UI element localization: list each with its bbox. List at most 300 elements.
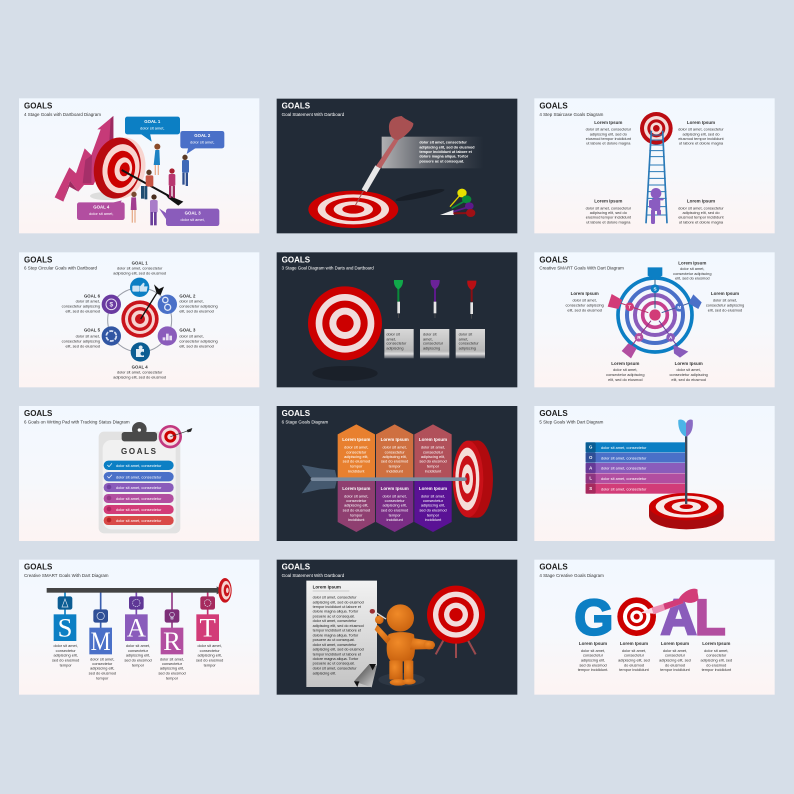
hexagon 5: sed do eiusmod xyxy=(381,507,408,512)
text: R: consectetur adipiscing xyxy=(606,372,645,377)
stacked bars: dolor sit amet, consectetur xyxy=(601,486,647,491)
grey text band: posuere ac ut consequat. xyxy=(419,159,464,163)
text: A: elit, sed do eiusmod xyxy=(671,377,706,382)
text: bottom left: dolor sit amet, consectetur xyxy=(586,205,632,210)
text columns: consectetur xyxy=(624,653,645,658)
hexagon 1: adipiscing elit, xyxy=(344,454,369,459)
hexagon 5: Lorem Ipsum xyxy=(381,486,409,491)
text columns: consectetur xyxy=(706,653,727,658)
people xyxy=(131,144,189,225)
slide subtitle: 3 Stage Goal Diagram with Darts and Dartboard xyxy=(282,266,374,271)
dartboard xyxy=(89,134,149,202)
text columns: dolor sit amet, xyxy=(704,648,729,653)
status list: dolor sit amet, consectetur xyxy=(116,485,162,490)
paper note: posuere ac ut consequat. xyxy=(313,662,355,666)
hexagon 5: tempor xyxy=(389,512,401,517)
letter badges: S xyxy=(653,286,657,291)
text: R: consectetur xyxy=(162,661,183,666)
hexagon 5: consectetur xyxy=(385,498,405,503)
word GOAL letters: L xyxy=(695,590,726,646)
connectors xyxy=(65,588,208,628)
grey text band xyxy=(382,137,483,168)
text: top right: dolor sit amet, consectetur xyxy=(678,127,724,132)
arrow xyxy=(302,465,467,493)
text: bottom left: eiusmod tempor incididunt xyxy=(586,215,632,220)
status list: dolor sit amet, consectetur xyxy=(116,496,162,501)
text box 3: dolor sit xyxy=(459,331,473,336)
stacked bars: L xyxy=(589,476,592,481)
slide title: GOALS xyxy=(282,563,311,572)
text: goal 2: GOAL 2 xyxy=(179,294,196,299)
text: S: elit, sed do eiusmod xyxy=(675,276,710,281)
hexagon 6: tempor xyxy=(427,512,440,517)
hexagon 3: sed do eiusmod xyxy=(419,459,447,464)
letter blocks: T xyxy=(200,613,216,643)
text: A: consectetur xyxy=(128,648,149,653)
letter blocks: M xyxy=(91,626,111,656)
slide title: GOALS xyxy=(282,255,311,264)
paper note xyxy=(306,581,377,687)
text columns: adipiscing elit, sed xyxy=(700,657,732,662)
text: bottom right: dolor sit amet, consectetur xyxy=(678,205,724,210)
hexagon 3: adipiscing elit, xyxy=(421,454,445,459)
text columns: tempor incididunt xyxy=(619,667,650,672)
dart arrow xyxy=(122,170,183,206)
hexagon 6: incididunt xyxy=(425,517,442,522)
word GOAL letters: G xyxy=(574,590,613,646)
text: bottom right: Lorem Ipsum xyxy=(687,199,715,204)
text: goal 4: GOAL 4 xyxy=(132,364,148,369)
paper note: adipiscing elit, sed do eiusmod xyxy=(313,600,364,604)
text: T: consectetur adipiscing xyxy=(565,302,604,307)
dartboard xyxy=(640,112,673,145)
callout: goal 3 xyxy=(159,208,219,226)
status list xyxy=(104,461,174,525)
hand dart xyxy=(370,609,386,619)
slide title: GOALS xyxy=(24,255,53,264)
slide subtitle: 6 Stage Goals Diagram xyxy=(282,419,329,424)
status list: dolor sit amet, consectetur xyxy=(116,463,162,468)
slide subtitle: 6 Step Circular Goals with Dartboard xyxy=(24,266,98,271)
five darts xyxy=(608,267,702,358)
text: R: adipiscing elit, xyxy=(160,666,184,671)
paper note: dolore magna aliqua. Tortor xyxy=(313,633,359,637)
text: goal 2 xyxy=(179,294,218,314)
icon circles: $ xyxy=(109,302,113,309)
callout: goal 4: GOAL 4 xyxy=(93,205,110,210)
text: T: tempor xyxy=(204,662,216,667)
text: A: consectetur adipiscing xyxy=(669,372,708,377)
slide title: GOALS xyxy=(539,409,568,418)
text columns: consectetur xyxy=(665,653,686,658)
text columns: dolor sit amet, xyxy=(581,648,605,653)
hexagon 2: sed do eiusmod xyxy=(381,459,408,464)
paper note: tempor incididunt ut labore et xyxy=(313,605,362,609)
text columns: adipiscing elit, sed xyxy=(618,657,650,662)
text box 1: adipiscing xyxy=(386,346,404,351)
text: top right: adipiscing elit, sed do xyxy=(682,131,720,136)
hexagon 1: dolor sit amet, xyxy=(344,445,369,450)
slide title: GOALS xyxy=(24,102,53,111)
callout: goal 4: dolor sit amet, xyxy=(89,211,114,216)
status list: dolor sit amet, consectetur xyxy=(116,507,162,512)
panel: goal statement with dartboard xyxy=(277,99,517,233)
text: T: Lorem Ipsum xyxy=(571,291,599,296)
text columns: Lorem Ipsum xyxy=(702,641,730,646)
text: T: consectetur xyxy=(200,648,220,653)
text: goal 1: GOAL 1 xyxy=(132,261,148,266)
paper note: dolor sit amet, consectetur xyxy=(313,596,357,600)
text box 2: consectetur xyxy=(423,341,444,346)
hexagon 4: tempor xyxy=(350,512,363,517)
hexagon 5: incididunt xyxy=(386,517,404,522)
text: goal 2: dolor sit amet, xyxy=(179,299,204,304)
text box 3: adipiscing xyxy=(459,346,476,351)
text: S: dolor sit amet, xyxy=(680,266,705,271)
icon: rising arrow xyxy=(55,116,113,202)
text: top right: ut labore et dolore magna xyxy=(679,141,724,146)
callout: goal 2: dolor sit amet, xyxy=(190,139,215,144)
status list: dolor sit amet, consectetur xyxy=(116,518,162,523)
text columns: dolor sit amet, xyxy=(622,648,646,653)
hexagon 2: consectetur xyxy=(385,449,405,454)
stacked bars xyxy=(586,442,686,494)
slide title: GOALS xyxy=(539,102,568,111)
panel: 4 step staircase goals xyxy=(534,98,775,233)
hexagon 5: adipiscing elit, xyxy=(382,503,407,508)
grey text band: dolor sit amet, consectetur xyxy=(419,141,467,145)
text: goal 5: elit, sed do eiusmod xyxy=(66,343,100,348)
text: T: adipiscing elit, xyxy=(197,653,222,658)
hexagon 1 xyxy=(338,424,375,478)
text columns: adipiscing elit, xyxy=(581,657,605,662)
hexagon 1: sed do eiusmod xyxy=(343,459,370,464)
text: T: dolor sit amet, xyxy=(197,643,222,648)
hexagon 6: consectetur xyxy=(423,498,444,503)
horizontal dart bar xyxy=(47,578,232,603)
stacked bars: O xyxy=(589,455,593,460)
pink dart xyxy=(640,589,698,614)
hexagon 3: incididunt xyxy=(425,468,442,473)
text columns: adipiscing elit, sed xyxy=(659,657,691,662)
text: top left: Lorem Ipsum xyxy=(594,120,622,125)
text: bottom left: ut labore et dolore magna xyxy=(586,219,631,224)
panel: 6 goals on writing pad xyxy=(19,406,259,541)
text: goal 4: adipiscing elit, sed do eiusmod xyxy=(113,375,166,380)
text box 2: amet, xyxy=(423,336,433,341)
letter blocks: A xyxy=(127,613,147,643)
hexagon 2: tempor xyxy=(389,464,401,469)
text: goal 2: consectetur adipiscing xyxy=(179,304,218,309)
text: S: Lorem Ipsum xyxy=(678,260,706,265)
slide subtitle: Goal Statement With Dartboard xyxy=(282,112,345,117)
hexagon 5 xyxy=(376,481,413,532)
panel: creative SMART timeline xyxy=(19,560,259,695)
text: T: elit, sed do eiusmod xyxy=(567,307,602,312)
paper note: tempor incididunt ut labore et xyxy=(313,652,362,656)
stacked bars: A xyxy=(589,465,593,470)
text box 2: dolor sit xyxy=(423,331,437,336)
dartboard on stand xyxy=(427,586,485,658)
text: top left: ut labore et dolore magna xyxy=(586,141,631,146)
text box 1: consectetur xyxy=(386,341,407,346)
text box 1: amet, xyxy=(386,336,396,341)
text box 2: adipiscing xyxy=(423,346,440,351)
text columns: Lorem Ipsum xyxy=(620,641,648,646)
text columns: Lorem Ipsum xyxy=(579,641,607,646)
dartboard xyxy=(308,286,382,381)
text: goal 5: dolor sit amet, xyxy=(76,334,100,339)
panel: creative SMART goals dartboard xyxy=(534,252,775,387)
letter blocks: R xyxy=(163,626,181,656)
text: M: consectetur xyxy=(92,661,113,666)
text: S xyxy=(673,260,712,281)
text box 3 xyxy=(456,329,485,358)
hexagon 1: consectetur xyxy=(346,449,367,454)
text: M: adipiscing elit, xyxy=(90,666,115,671)
text: goal 1 xyxy=(113,261,166,276)
text: M: dolor sit amet, xyxy=(713,298,737,303)
text: R: sed do eiusmod xyxy=(158,670,186,675)
text: goal 4: dolor sit amet, consectetur xyxy=(117,370,163,375)
paper note: adipiscing elit. xyxy=(313,671,336,675)
letter badges: A xyxy=(669,335,673,340)
stacked bars: S xyxy=(589,486,592,491)
hexagon 4: dolor sit amet, xyxy=(344,493,369,498)
text columns: do eiusmod xyxy=(706,662,726,667)
icon tiles xyxy=(58,596,215,623)
slide title: GOALS xyxy=(24,409,53,418)
text: S: adipiscing elit, xyxy=(53,653,78,658)
text: goal 3: consectetur adipiscing xyxy=(179,338,218,343)
callout: goal 4 xyxy=(77,200,125,220)
dart: purple xyxy=(431,280,440,318)
text: goal 3: elit, sed do eiusmod xyxy=(179,343,214,348)
text columns xyxy=(578,641,732,672)
paper note: tempor incididunt ut labore et xyxy=(313,629,362,633)
stacked bars: G xyxy=(589,445,593,450)
slide title: GOALS xyxy=(539,563,568,572)
letter badges: T xyxy=(628,304,631,309)
text: top left: adipiscing elit, sed do xyxy=(590,131,627,136)
clipboard heading: GOALS xyxy=(121,447,158,456)
slide subtitle: Creative SMART Goals With Dart Diagram xyxy=(539,266,624,271)
slide subtitle: 4 Stage Goals with Dartboard Diagram xyxy=(24,112,101,117)
hexagon 3: dolor sit amet, xyxy=(421,445,445,450)
slide title: GOALS xyxy=(282,409,311,418)
hexagon 4 xyxy=(338,481,375,532)
hexagon 4: incididunt xyxy=(348,517,365,522)
text: A: dolor sit amet, xyxy=(126,643,150,648)
text columns: dolor sit amet, xyxy=(663,648,687,653)
text: bottom left: adipiscing elit, sed do xyxy=(590,210,627,215)
ring xyxy=(108,288,172,352)
text: S: consectetur adipiscing xyxy=(673,271,712,276)
panel: goal statement with figure xyxy=(277,560,517,695)
text box 3: consectetur xyxy=(459,341,479,346)
dart: green xyxy=(394,280,403,318)
hexagon 4: sed do eiusmod xyxy=(343,507,370,512)
text: goal 1: dolor sit amet, consectetur xyxy=(117,266,163,271)
hexagon 3: Lorem Ipsum xyxy=(419,437,447,442)
text box 3: amet, xyxy=(459,336,468,341)
text: top right xyxy=(678,120,725,146)
slide subtitle: 4 Step Staircase Goals Diagram xyxy=(539,112,604,117)
paper note: dolor sit amet, consectetur xyxy=(313,619,357,623)
text: bottom right: eiusmod tempor incididunt xyxy=(678,215,725,220)
hexagon 5: dolor sit amet, xyxy=(382,493,407,498)
text: goal 6 xyxy=(62,294,101,314)
text: bottom right: adipiscing elit, sed do xyxy=(682,210,720,215)
stacked bars: dolor sit amet, consectetur xyxy=(601,466,647,471)
text: M: dolor sit amet, xyxy=(90,656,115,661)
text: M: tempor xyxy=(96,675,109,680)
letter badges: R xyxy=(637,335,641,340)
text: S: consectetur xyxy=(56,648,76,653)
letter badges xyxy=(625,284,684,342)
text: goal 5: consectetur adipiscing xyxy=(62,338,100,343)
text: bottom right xyxy=(678,199,725,224)
text: S: dolor sit amet, xyxy=(53,643,78,648)
text columns: tempor incididunt. xyxy=(578,667,608,672)
letter blocks xyxy=(54,613,219,656)
hexagon 3: consectetur xyxy=(423,449,444,454)
text: A: Lorem Ipsum xyxy=(675,361,703,366)
text: top left: dolor sit amet, consectetur xyxy=(586,127,632,132)
3D dartboard xyxy=(649,493,724,529)
text box 2 xyxy=(420,329,449,358)
letter badges: M xyxy=(677,305,681,310)
callout: goal 1 xyxy=(125,117,180,142)
stacked bars: dolor sit amet, consectetur xyxy=(601,445,647,450)
stacked bars: dolor sit amet, consectetur xyxy=(601,476,647,481)
hexagon 4: Lorem Ipsum xyxy=(342,486,370,491)
text: R: dolor sit amet, xyxy=(160,656,184,661)
callout: goal 2 xyxy=(180,131,224,154)
text: R: Lorem Ipsum xyxy=(611,361,639,366)
text: A: dolor sit amet, xyxy=(676,367,701,372)
paper note: dolor sit amet, consectetur xyxy=(313,667,357,671)
text: M: consectetur adipiscing xyxy=(706,302,744,307)
text: A: tempor xyxy=(132,662,145,667)
slide subtitle: 5 Step Goals With Dart Diagram xyxy=(539,419,604,424)
callout: goal 1: GOAL 1 xyxy=(144,119,161,124)
status list: dolor sit amet, consectetur xyxy=(116,474,162,479)
text columns: sed do eiusmod xyxy=(579,662,607,667)
text: A: adipiscing elit, xyxy=(126,653,150,658)
letter blocks: S xyxy=(58,613,72,643)
hexagon 1: incididunt xyxy=(348,468,365,473)
text: S: sed do eiusmod xyxy=(52,657,79,662)
text: T: dolor sit amet, xyxy=(572,298,597,303)
text: M: sed do eiusmod xyxy=(89,670,116,675)
text: goal 6: consectetur adipiscing xyxy=(62,304,100,309)
hexagon 2: incididunt xyxy=(386,468,404,473)
text: top left: eiusmod tempor incididunt xyxy=(586,136,632,141)
hexagon 3 xyxy=(414,424,452,478)
paper note: posuere ac ut consequat. xyxy=(313,638,355,642)
hexagon 2: adipiscing elit, xyxy=(382,454,407,459)
badge dartboard xyxy=(159,425,192,448)
slide subtitle: 6 Goals on Writing Pad with Tracking Status Diagram xyxy=(24,419,130,424)
text: T: sed do eiusmod xyxy=(196,657,223,662)
dart xyxy=(141,284,164,319)
hexagon 4: adipiscing elit, xyxy=(344,503,369,508)
text: goal 3: GOAL 3 xyxy=(179,328,196,333)
text: top right: eiusmod tempor incididunt xyxy=(678,136,725,141)
text: goal 5 xyxy=(62,328,101,348)
text: goal 6: elit, sed do eiusmod xyxy=(66,309,100,314)
text box 1 xyxy=(384,329,414,358)
dart xyxy=(678,419,693,504)
callout: goal 2: GOAL 2 xyxy=(194,133,211,138)
text box 1: dolor sit xyxy=(386,331,401,336)
hexagon 6: adipiscing elit, xyxy=(421,503,445,508)
slide title: GOALS xyxy=(539,255,568,264)
dartboard xyxy=(121,300,159,338)
concentric rings xyxy=(618,278,692,352)
slide subtitle: Goal Statement With Dartboard xyxy=(282,573,345,578)
clipboard xyxy=(99,422,180,533)
hexagon 2: Lorem Ipsum xyxy=(381,437,409,442)
panel: 6 step circular goals xyxy=(19,252,259,387)
panel: 3 stage goal with darts xyxy=(277,252,517,387)
text: goal 6: dolor sit amet, xyxy=(76,299,100,304)
text: goal 6: GOAL 6 xyxy=(84,294,101,299)
text: goal 2: elit, sed do eiusmod xyxy=(179,309,214,314)
text columns: Lorem Ipsum xyxy=(661,641,689,646)
hexagon 1: Lorem Ipsum xyxy=(342,437,370,442)
dart: red xyxy=(467,281,476,319)
large dart xyxy=(355,116,413,205)
dartboard xyxy=(308,191,398,228)
paper note: Lorem Ipsum xyxy=(313,585,341,590)
hexagon 2: dolor sit amet, xyxy=(382,445,407,450)
slide subtitle: 4 Stage Creative Goals Diagram xyxy=(539,573,604,578)
callout: goal 3: GOAL 3 xyxy=(185,211,201,216)
panel: 4 stage creative goals xyxy=(534,560,775,695)
hexagon 2 xyxy=(376,424,413,478)
text: top left xyxy=(586,120,632,146)
paper note: dolore magna aliqua. Tortor xyxy=(313,657,359,661)
hexagon 1: tempor xyxy=(350,464,363,469)
text: goal 5: GOAL 5 xyxy=(84,328,101,333)
hexagon 6: sed do eiusmod xyxy=(419,507,447,512)
small coloured darts xyxy=(395,187,475,217)
slide title: GOALS xyxy=(282,102,311,111)
target O xyxy=(617,597,656,636)
callout: goal 1: dolor sit amet, xyxy=(140,125,165,130)
dartboard 3D xyxy=(453,440,493,518)
text: R: elit, sed do eiusmod xyxy=(608,377,643,382)
text columns: tempor incididunt xyxy=(702,667,732,672)
text: A: sed do eiusmod xyxy=(124,657,152,662)
text: goal 4 xyxy=(113,364,166,380)
paper note: adipiscing elit, sed do eiusmod xyxy=(313,624,364,628)
panel: 6 stage goals hexagons xyxy=(277,406,517,541)
slide title: GOALS xyxy=(24,563,53,572)
text columns: tempor incididunt xyxy=(660,667,691,672)
paper note: adipiscing elit, sed do eiusmod xyxy=(313,648,364,652)
stacked bars: dolor sit amet, consectetur xyxy=(601,455,647,460)
icon circles xyxy=(102,278,177,362)
text: M xyxy=(706,291,744,312)
ladder xyxy=(646,131,667,223)
text: bottom left: Lorem Ipsum xyxy=(594,199,622,204)
orange figure xyxy=(375,604,435,686)
grey text band: adipiscing elit, sed do eiusmod xyxy=(419,145,475,149)
paper note: posuere ac ut consequat. xyxy=(313,614,355,618)
